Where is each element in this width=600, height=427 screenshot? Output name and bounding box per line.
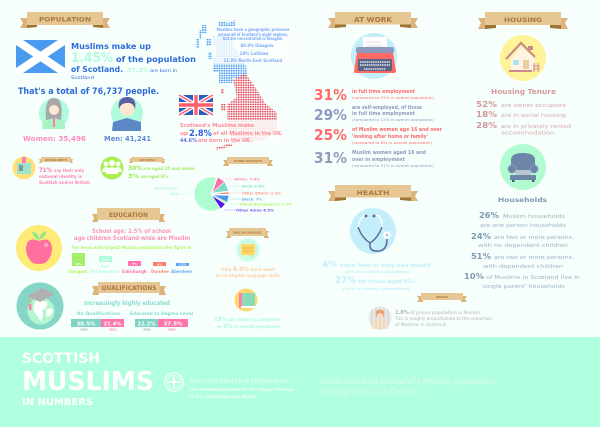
- text: prison stat: of Muslims in Scotland.: [395, 322, 447, 328]
- icon: speech bubble: [236, 238, 260, 262]
- title: Scottish Muslims in Numbers: MUSLIMS: [22, 367, 154, 397]
- text: subtitle: [320, 377, 495, 398]
- panel: map of UK: [178, 20, 293, 150]
- text: UK share: 44.6%: [180, 138, 197, 144]
- list: household stats: 26%: [479, 211, 499, 220]
- list: housing tenure stats: are in social housing: [501, 113, 566, 119]
- panel: at work: [314, 12, 443, 168]
- list: housing tenure stats: 52%: [476, 100, 497, 109]
- text: UK share: [178, 120, 285, 144]
- text: national identity stat: national identity is: [39, 174, 82, 180]
- heading: qualifications ribbon: QUALIFICATIONS: [102, 285, 156, 292]
- heading: education ribbon: EDUCATION: [109, 211, 148, 219]
- chart: education bars: Edinburgh: [122, 269, 147, 274]
- stat: self-employed: [314, 105, 435, 124]
- heading: english language ribbon: ENGLISH LANGUAGE: [234, 230, 262, 234]
- text: Muslims make up 1.45%: 37.3%: [127, 68, 150, 74]
- list: household stats: are two or more persons,: [494, 235, 575, 241]
- text: bad health stat: have 'bad or very bad health': [340, 263, 432, 269]
- text: subtitle: through the 2011 Census: [320, 388, 420, 398]
- stat: looking after home: of Muslim women age 16 and over: [352, 127, 443, 133]
- label: women count: Women: 35,496: [23, 135, 86, 143]
- chart: dotted map: [196, 20, 277, 150]
- list: household stats: Muslim households: [503, 214, 565, 220]
- chart: education bars: Renfrewshire: [90, 269, 120, 274]
- icon: university crest: [165, 373, 183, 391]
- footer band: [0, 337, 600, 427]
- stat: women in employment: 31%: [314, 149, 347, 167]
- icon: prisoner behind bars: [368, 306, 392, 330]
- list: household stats: are two or more persons,: [494, 255, 575, 261]
- panel: qualifications: [16, 282, 193, 332]
- text: university name: THE UNIVERSITY of EDINBURGH: [189, 378, 289, 385]
- text: aged 65+ stat: [335, 276, 416, 291]
- text: students stat: to 6% in overall population: [217, 322, 280, 330]
- list: housing tenure stats: 18%: [476, 110, 497, 119]
- chart: education bars: 3.5%: [179, 263, 187, 267]
- text: school age: age children Scotland-wide are Muslim: [74, 236, 190, 242]
- chart: no qualifications: No Qualifications: [77, 311, 120, 317]
- stat: full time employment: in full time employment: [352, 89, 416, 95]
- icon: man: [111, 97, 143, 131]
- legend: ethnicity labels: [154, 176, 292, 212]
- icon: Scottish flag: [16, 40, 65, 73]
- icon: graduation cap and globe: [16, 282, 64, 330]
- list: housing tenure stats: are owner occupiers: [501, 103, 566, 109]
- text: households heading: Households: [498, 196, 547, 204]
- list: household stats: of Muslims in Scotland live in: [486, 275, 580, 281]
- icon: apple: [16, 225, 62, 271]
- chart: education bars: East: [101, 264, 109, 269]
- list: household stats: 'single parent' households: [481, 284, 566, 290]
- text: english language stat: or no English language skills: [216, 273, 280, 279]
- chart: education bars: Dundee: [151, 269, 169, 274]
- chart: no qualifications: 21.4%: [104, 322, 122, 328]
- text: english language stat: [216, 265, 280, 279]
- text: university name: in the Contemporary World: [189, 394, 256, 400]
- text: Muslims make up 1.45%: of the population: [116, 55, 196, 64]
- text: university name: [189, 378, 294, 400]
- list: housing tenure stats: accommodation: [501, 130, 554, 136]
- list: household stats: are one person households: [480, 223, 566, 229]
- stat: self-employed: in full time employment: [352, 111, 416, 117]
- legend: ethnicity labels: White: 7.8%: [234, 176, 260, 182]
- text: national identity stat: [39, 166, 90, 186]
- text: qualifications subtitle: Increasingly highly educated: [84, 300, 170, 307]
- list: household stats: 24%: [471, 232, 491, 241]
- stat: women in employment: over in employment: [352, 157, 406, 163]
- text: UK share: of all Muslims in the UK.: [213, 131, 283, 137]
- text: total people: That's a total of 76,737 people.: [18, 87, 159, 97]
- text: english language stat: Only 4.5% have weak: [221, 265, 276, 273]
- heading: health ribbon: HEALTH: [356, 189, 390, 197]
- chart: education bars: Aberdeen: [171, 269, 192, 274]
- text: Muslims make up 1.45%: Scotland: [71, 75, 94, 80]
- icon: house: [500, 35, 546, 81]
- chart: degree level: Educated to Degree Level: [130, 311, 193, 317]
- text: Muslims make up 1.45%: are born in: [150, 68, 177, 73]
- chart: no qualifications: [71, 311, 124, 332]
- heading: population ribbon: POPULATION: [39, 16, 91, 24]
- list: household stats: 51%: [471, 252, 491, 261]
- panel: age profile: [100, 156, 196, 180]
- title: Scottish Muslims in Numbers: [22, 351, 154, 408]
- stat: looking after home: (compared to 6% in overall population): [352, 141, 433, 145]
- stat: self-employed: (compared to 12% in overall population): [352, 118, 435, 122]
- text: Muslims make up 1.45%: Muslims make up: [71, 42, 151, 51]
- text: UK share: 2.8%: [189, 129, 212, 139]
- chart: education bars: Glasgow: [68, 269, 87, 274]
- text: Muslims make up 1.45%: of Scotland.: [71, 65, 123, 74]
- text: school age: [74, 229, 190, 242]
- legend: ethnicity labels: Arab 9.8%: [242, 184, 265, 188]
- text: prison stat: [394, 310, 492, 328]
- text: prison stat: of prison population is Muslim: [410, 310, 480, 316]
- stat: looking after home: 'looking after home or family': [352, 134, 428, 140]
- text: UK share: are born in the UK.: [198, 138, 252, 144]
- icon: stethoscope: [350, 208, 396, 254]
- icon: id badge: [12, 156, 36, 180]
- stat: looking after home: [314, 126, 443, 145]
- text: Muslims make up 1.45%: [71, 42, 196, 80]
- text: housing tenure heading: Housing Tenure: [491, 88, 556, 96]
- icon: armchair: [500, 144, 546, 190]
- stat: full time employment: [314, 86, 435, 104]
- heading: prison ribbon: PRISON: [436, 295, 449, 299]
- stat: self-employed: 29%: [314, 106, 347, 124]
- list: household stats: 10%: [464, 272, 484, 281]
- stat: women in employment: [314, 149, 435, 168]
- title: Scottish Muslims in Numbers: SCOTTISH: [22, 351, 100, 367]
- panel: national identity: [12, 156, 90, 186]
- panel: geographic presence note: but are concentrated in Glasgow.: [223, 36, 283, 41]
- panel: population: [16, 12, 196, 143]
- chart: education bars: 5%: [132, 262, 137, 266]
- list: household stats: with no dependent children: [478, 243, 568, 249]
- text: bad health stat: (6% in overall population): [345, 269, 409, 274]
- legend: ethnicity labels: Black: 7%: [242, 196, 262, 202]
- heading: national identity ribbon: NATIONAL IDENTITY: [45, 158, 67, 162]
- text: age profile stats: 3%: [128, 173, 139, 180]
- legend: ethnicity labels: South Asian:: [154, 186, 178, 190]
- list: household stats: [464, 211, 580, 290]
- stat: women in employment: Muslim women aged 16 and: [352, 150, 427, 156]
- text: national identity stat: say their only: [54, 168, 84, 174]
- icon: people group: [100, 156, 124, 180]
- panel: geographic presence note: 19% Lothian: [240, 51, 268, 57]
- panel: education: [16, 208, 193, 274]
- panel: geographic presence note: 11.8% North East Scotland: [224, 58, 282, 64]
- text: aged 65+ stat: for those aged 65+: [358, 279, 416, 285]
- chart: no qualifications: 38.5%: [76, 322, 96, 328]
- text: age profile stats: are aged 15 and under: [143, 166, 196, 172]
- text: national identity stat: 71%: [39, 166, 52, 174]
- heading: population ribbon: [20, 12, 110, 28]
- heading: education ribbon: [92, 208, 165, 222]
- text: age profile stats: 30%: [128, 165, 142, 172]
- list: housing tenure stats: 28%: [476, 121, 497, 130]
- panel: geographic presence note: across all of Scotland's eight regions,: [218, 32, 288, 37]
- icon: book: [234, 288, 258, 312]
- chart: degree level: 22.2%: [138, 322, 156, 328]
- text: aged 65+ stat: (14% in overall population): [342, 286, 410, 291]
- stat: women in employment: (compared to 51% in overall population): [352, 164, 435, 168]
- panel: students: [214, 288, 280, 330]
- heading: at work ribbon: [328, 12, 418, 28]
- panel: ethnic diversity: [154, 157, 292, 212]
- list: housing tenure stats: are in privately rented: [501, 124, 571, 130]
- stat: looking after home: 25%: [314, 126, 347, 144]
- text: school age: School age: 2.5% of school: [92, 229, 171, 235]
- legend: ethnicity labels: 65%: [170, 192, 179, 196]
- panel: geographic presence note: Muslims have a geographic presence: [216, 27, 290, 32]
- text: national identity stat: Scottish and/or British: [39, 180, 90, 186]
- legend: ethnicity labels: Other Ethnic: 2.2%: [242, 190, 281, 196]
- chart: degree level: [130, 311, 193, 332]
- label: men count: Men: 41,241: [104, 135, 151, 143]
- text: UK share: up: [180, 131, 188, 137]
- chart: degree level: 2001: [143, 328, 151, 332]
- panel: households: [464, 144, 580, 290]
- text: age profile stats: [128, 165, 196, 180]
- heading: housing ribbon: HOUSING: [504, 16, 542, 24]
- chart: education bars: 4%: [157, 262, 162, 266]
- stat: full time employment: 31%: [314, 86, 347, 104]
- legend: ethnicity labels: Other Asian 6.5%: [236, 208, 274, 212]
- panel: english language: [216, 228, 280, 279]
- stat: self-employed: are self-employed, of those: [352, 105, 423, 111]
- chart: education bars: 5.5%: [102, 258, 110, 262]
- text: aged 65+ stat: 27%: [335, 276, 356, 286]
- text: bad health stat: 4%: [322, 260, 337, 270]
- heading: ethnic diversity ribbon: ETHNIC DIVERSITY: [234, 159, 263, 163]
- chart: education bars: [68, 253, 192, 274]
- text: students stat: 19% are students, compared: [214, 315, 280, 323]
- chart: ethnicity pie: [194, 177, 229, 211]
- heading: at work ribbon: AT WORK: [354, 16, 393, 24]
- panel: geographic presence note: 60.8% Glasgow: [240, 43, 274, 49]
- legend: ethnicity labels: Mixed Background: 1.7%: [240, 202, 292, 206]
- panel: geographic presence note: [214, 27, 293, 64]
- text: areas note: For areas with largest Muslim populations the figure is:: [72, 245, 193, 251]
- text: Muslims make up 1.45%: 1.45%: [71, 51, 113, 66]
- chart: no qualifications: 2001: [80, 328, 88, 332]
- panel: housing: [476, 12, 571, 136]
- text: prison stat: This is roughly proportionate to the proportion: [394, 316, 492, 322]
- icon: UK flag: [179, 95, 213, 115]
- text: UK share: Scotland's Muslims make: [180, 123, 254, 129]
- text: students stat: [214, 315, 280, 330]
- icon: woman: [39, 98, 69, 129]
- icon: typewriter: [351, 33, 397, 79]
- list: household stats: with dependent children: [483, 264, 563, 270]
- stat: full time employment: (compared to 51% in overall population): [352, 96, 435, 100]
- text: age profile stats: are aged 65+: [141, 174, 169, 180]
- heading: age profile ribbon: AGE PROFILE: [139, 158, 155, 162]
- chart: education bars: 10%: [75, 262, 82, 266]
- panel: health: [322, 185, 432, 291]
- title: Scottish Muslims in Numbers: IN NUMBERS: [22, 397, 93, 408]
- list: housing tenure stats: [476, 100, 571, 136]
- text: bad health stat: [322, 260, 432, 274]
- text: university name: The Alwaleed Centre for the Study of Islam: [189, 387, 294, 393]
- text: prison stat: 1.8%: [395, 310, 409, 316]
- text: subtitle: Understanding Scotland's Muslim population: [320, 377, 495, 387]
- chart: no qualifications: 2011: [109, 328, 117, 332]
- heading: qualifications ribbon: [92, 282, 166, 295]
- chart: degree level: 2011: [168, 328, 176, 332]
- panel: prison: [368, 293, 492, 330]
- chart: degree level: 37.5%: [164, 322, 183, 328]
